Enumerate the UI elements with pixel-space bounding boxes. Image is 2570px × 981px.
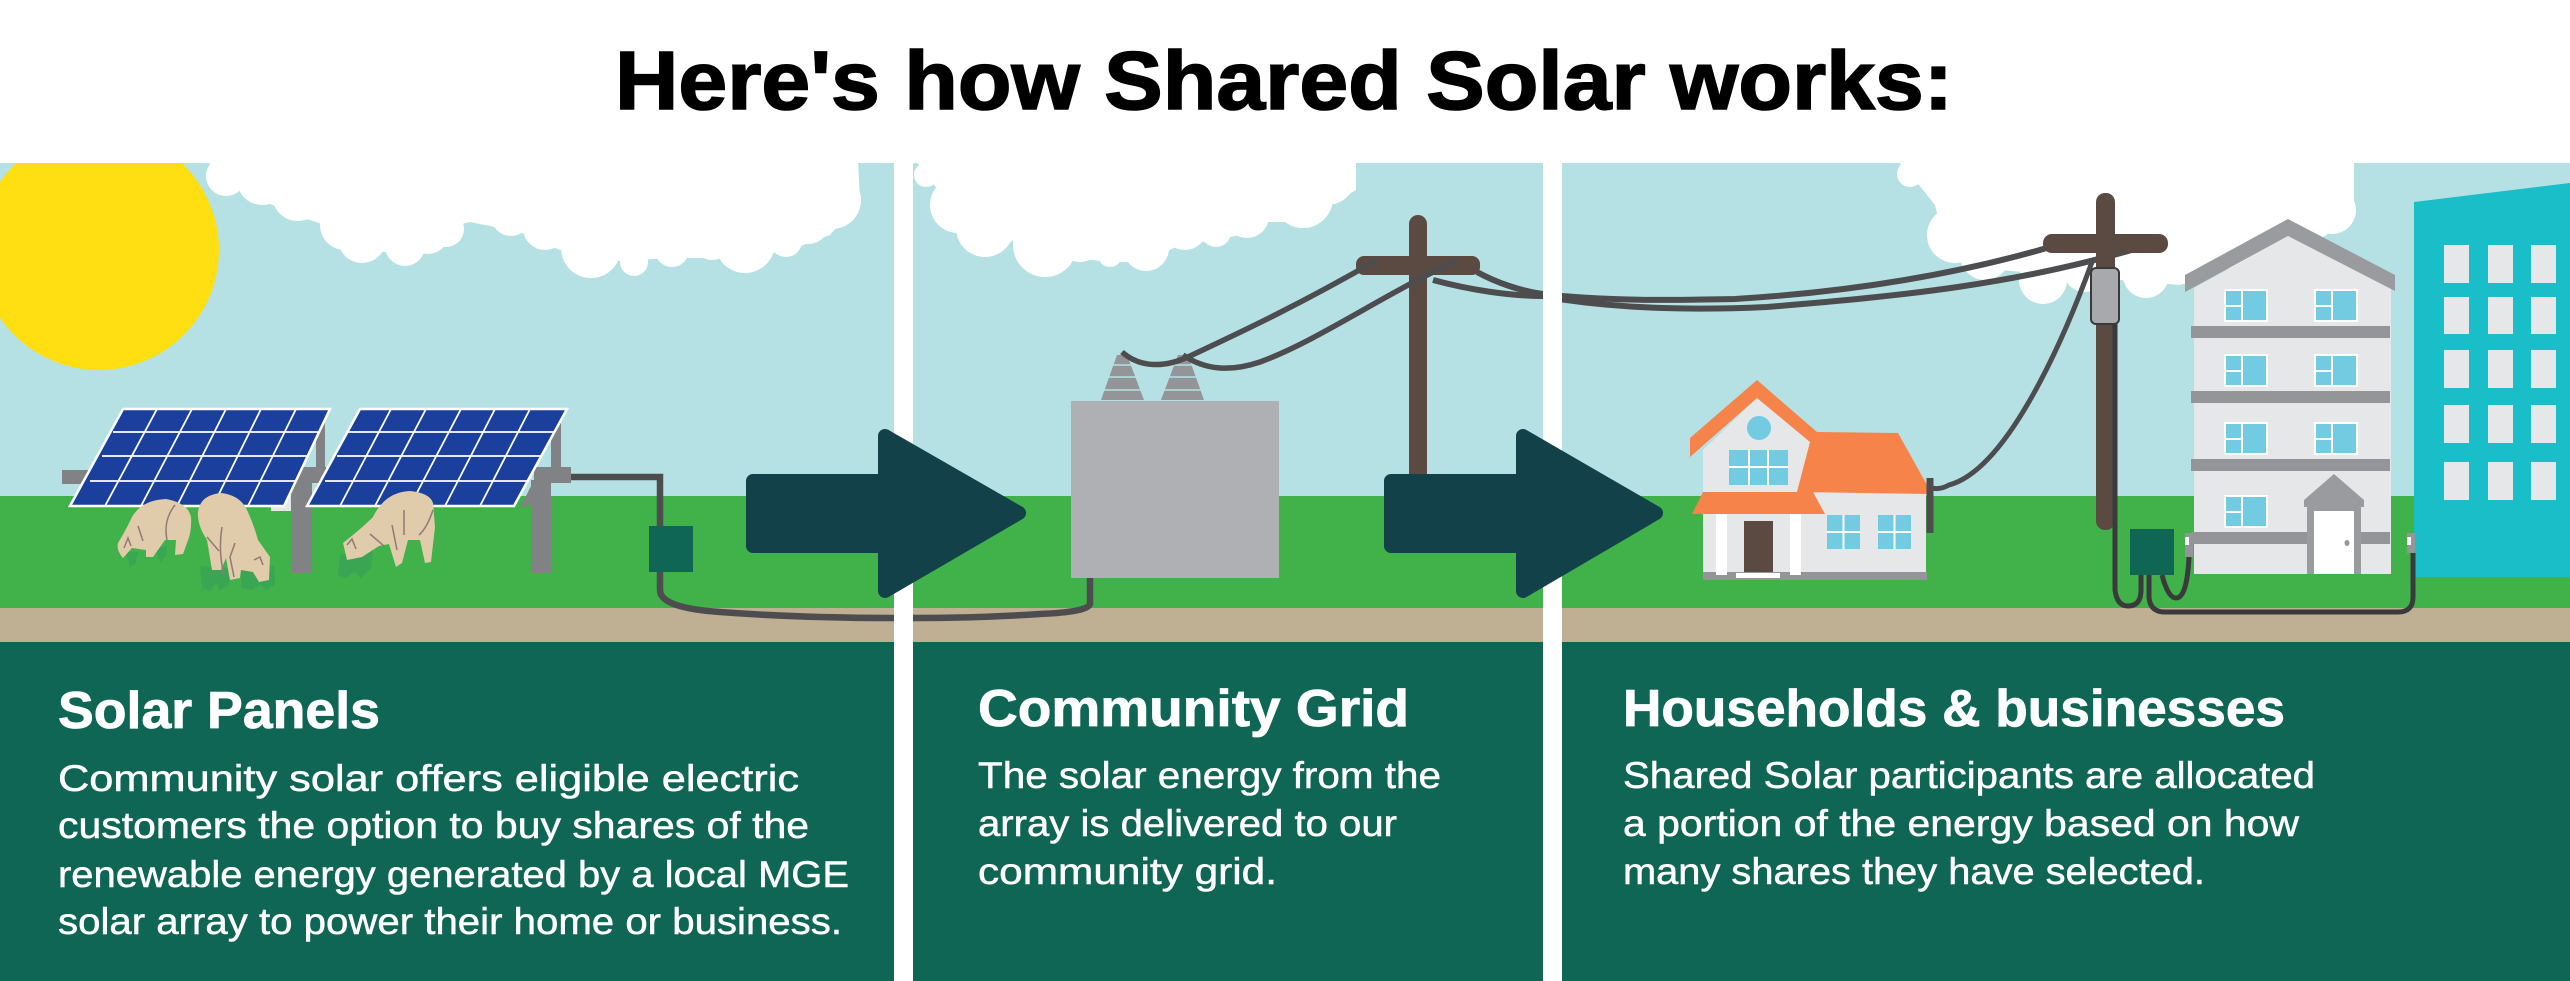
heading: Households & businesses	[1623, 680, 2285, 738]
teal office building	[2414, 183, 2570, 577]
body text: community grid.	[978, 851, 1277, 892]
cloud	[206, 155, 861, 278]
meter connectors	[2185, 533, 2415, 557]
icon: transformer box	[1071, 401, 1279, 578]
body text: The solar energy from the	[978, 755, 1441, 796]
body text	[978, 755, 1441, 892]
apartment door	[2304, 474, 2364, 574]
body text: array is delivered to our	[978, 803, 1397, 844]
heading: Solar Panels	[58, 682, 380, 740]
body text: solar array to power their home or business.	[58, 901, 842, 942]
wire: pole to house	[1930, 262, 2092, 533]
panel: solar panels scene	[0, 130, 894, 642]
office windows	[2444, 245, 2556, 500]
body text: customers the option to buy shares of the	[58, 805, 809, 846]
wire: array to grid	[571, 477, 894, 618]
house roof	[1690, 380, 1932, 514]
cloud	[1897, 160, 2356, 304]
icon: inverter box	[649, 526, 693, 572]
pole-mounted transformer	[2091, 268, 2119, 324]
solar array supports	[62, 423, 571, 573]
panel: households and businesses text	[1562, 642, 2570, 981]
panel: community grid text	[913, 642, 1543, 981]
title: Here's how Shared Solar works:	[615, 34, 1953, 127]
wires: grid to neighbourhood	[1433, 272, 1543, 296]
wire: underground to grid	[913, 578, 1090, 618]
apartment roof	[2185, 219, 2395, 292]
wires: pole overhead lines	[1540, 242, 2155, 309]
icon: utility pole	[1356, 215, 1480, 485]
arrow: panels to grid	[753, 436, 1019, 591]
apartment windows	[2224, 289, 2358, 528]
apartment building	[2185, 219, 2395, 574]
body text: Community solar offers eligible electric	[58, 758, 799, 799]
heading: Community Grid	[978, 680, 1409, 738]
wires: pole to transformer	[1122, 260, 1459, 368]
icon: transformer insulators	[1100, 355, 1210, 400]
icon: sheep middle	[198, 493, 275, 591]
body text: renewable energy generated by a local MGE	[58, 854, 849, 895]
body text	[1623, 755, 2315, 892]
body text: many shares they have selected.	[1623, 851, 2205, 892]
house	[1690, 380, 1932, 580]
icon: sun	[0, 163, 219, 370]
arrow: grid to households	[1391, 436, 1656, 591]
body text: Shared Solar participants are allocated	[1623, 755, 2315, 796]
icon: solar panel left	[70, 409, 330, 506]
house walls	[1703, 398, 1926, 573]
utility pole	[2043, 193, 2168, 530]
body text: a portion of the energy based on how	[1623, 803, 2299, 844]
house base	[1703, 572, 1927, 580]
house windows	[1729, 416, 1911, 549]
panel: solar panels text	[0, 642, 894, 981]
panel: community grid scene	[913, 147, 1543, 642]
icon: sheep right	[338, 491, 435, 578]
meter box	[2130, 529, 2174, 575]
panel: households and businesses scene	[1540, 160, 2570, 642]
house door	[1744, 521, 1773, 572]
apartment floor bands	[2191, 326, 2390, 544]
underground wires	[2115, 324, 2413, 612]
icon: solar panel right	[307, 409, 567, 506]
body text	[58, 758, 849, 942]
house porch pillars	[1716, 514, 1801, 578]
cloud	[914, 163, 1356, 277]
icon: sheep left	[118, 499, 191, 567]
